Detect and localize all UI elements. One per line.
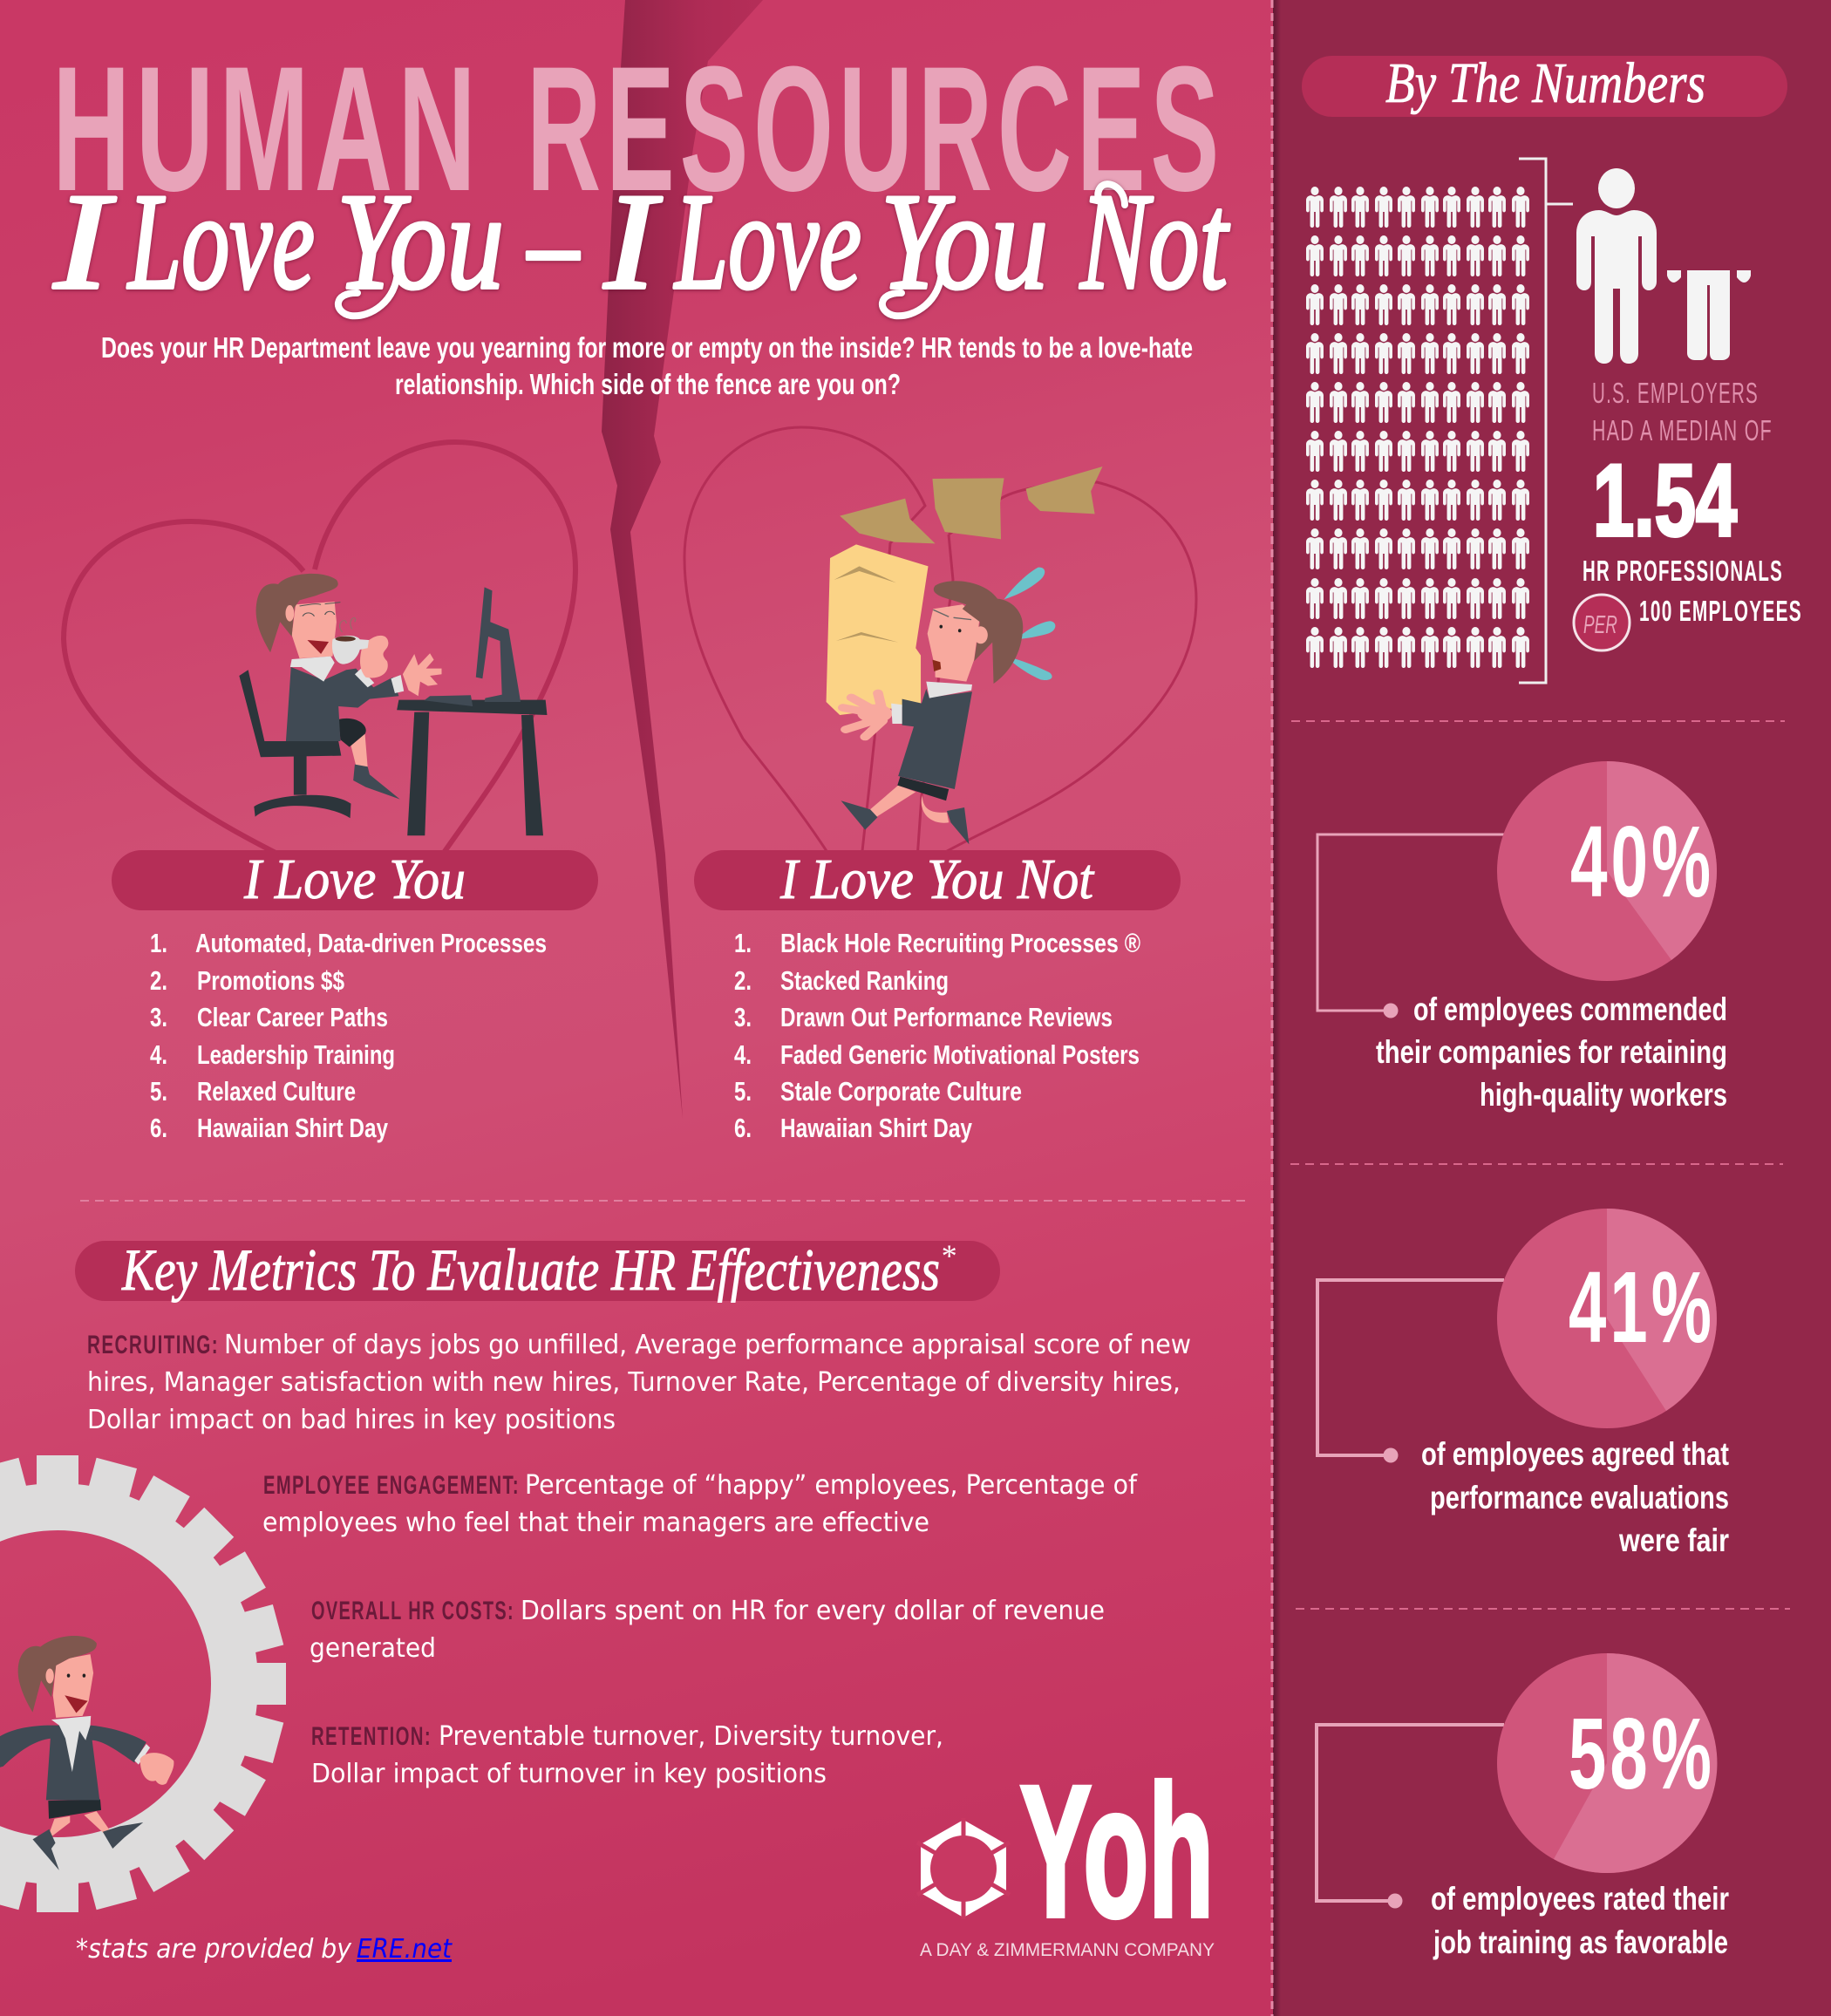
stat block: 40%: high-quality workers <box>1480 1077 1727 1113</box>
pill: I Love You: I Love You <box>243 848 466 911</box>
illustration: woman with coffee at desk <box>239 574 547 835</box>
text: recruiting <box>87 1330 1191 1435</box>
stat block: 41% <box>1317 1209 1729 1558</box>
chair <box>239 670 351 818</box>
coffee hand <box>360 636 388 678</box>
list: I Love You: Automated, Data-driven Processes <box>195 928 547 958</box>
list: I Love You Not: Drawn Out Performance Reviews <box>780 1002 1113 1032</box>
list: I Love You Not: 5. <box>734 1076 752 1107</box>
list: I Love You Not: Hawaiian Shirt Day <box>780 1113 973 1143</box>
stat: 1.54 HR professionals <box>1574 377 1802 650</box>
logo: Yoh: Yoh <box>1020 1747 1214 1956</box>
connector <box>1317 1725 1504 1908</box>
flying papers <box>840 467 1103 543</box>
stat block: 41%: 41% <box>1569 1250 1715 1364</box>
list: I Love You: Leadership Training <box>197 1039 395 1070</box>
stat block: 40%: their companies for retaining <box>1376 1034 1727 1070</box>
icon: hexagon mark <box>917 1818 1010 1919</box>
list: I Love You Not: 6. <box>734 1113 752 1143</box>
text: employee engagement <box>262 1470 1138 1538</box>
figure body <box>256 574 404 800</box>
stat block: 40%: of employees commended <box>1413 991 1727 1027</box>
pie chart 40% <box>1497 761 1717 981</box>
logo: Yoh <box>917 1747 1215 1960</box>
text: overall HR costs: generated <box>310 1633 436 1664</box>
list: I Love You Not: Stacked Ranking <box>780 965 949 996</box>
pill: key metrics heading: Key Metrics To Evaluate HR Effectiveness <box>121 1236 940 1303</box>
list: I Love You: 4. <box>150 1039 167 1070</box>
text: retention: Dollar impact of turnover in key positions <box>311 1759 827 1789</box>
list: I Love You: Promotions $$ <box>197 965 344 996</box>
bracket <box>1519 159 1573 683</box>
list: I Love You Not: 2. <box>734 965 752 996</box>
illustration: woman walking in gear <box>0 1636 174 1870</box>
script swashes <box>338 184 1125 316</box>
list: I Love You: Relaxed Culture <box>197 1076 356 1107</box>
footnote: ERE.net <box>357 1934 453 1965</box>
list: I Love You: Clear Career Paths <box>197 1002 388 1032</box>
subtitle: I <box>53 166 116 318</box>
list: I Love You Not: Black Hole Recruiting Processes ® <box>780 928 1140 958</box>
text: overall HR costs: Dollars spent on HR for every dollar of revenue <box>521 1596 1105 1626</box>
text: recruiting: hires, Manager satisfaction with new hires, Turnover Rate, Percentage of diversity hires, <box>87 1367 1181 1398</box>
pill: I Love You <box>112 848 598 911</box>
title <box>52 30 1224 228</box>
figure body <box>841 581 1023 844</box>
panel edge shadow <box>1273 0 1281 2016</box>
subtitle: I <box>603 166 662 318</box>
monitor and keyboard <box>424 587 521 706</box>
title: HUMAN <box>52 30 481 228</box>
icon: whole person <box>1576 168 1657 364</box>
stat block: 40% <box>1317 761 1727 1113</box>
list: I Love You: 2. <box>150 965 167 996</box>
logo: Yoh: A DAY & ZIMMERMANN COMPANY <box>920 1940 1215 1960</box>
pictogram: 100 employees grid <box>1306 187 1529 668</box>
sweat drops <box>1004 568 1055 680</box>
stat block: 41%: of employees agreed that <box>1421 1436 1729 1472</box>
stat: 1.54 HR professionals: PER <box>1583 611 1617 639</box>
text: recruiting: Number of days jobs go unfilled, Average performance appraisal score of new <box>224 1330 1191 1360</box>
stat block: 58%: job training as favorable <box>1433 1924 1728 1960</box>
heart outline: love <box>64 442 575 859</box>
list: I Love You Not: Stale Corporate Culture <box>780 1076 1022 1107</box>
subtitle <box>53 166 1230 318</box>
intro text: relationship. Which side of the fence are you on? <box>395 368 901 400</box>
stat block: 58%: 58% <box>1569 1697 1715 1810</box>
connector <box>1317 1280 1504 1463</box>
stat block: 40%: 40% <box>1570 805 1714 918</box>
list: I Love You: 3. <box>150 1002 167 1032</box>
pie chart 41% <box>1497 1209 1717 1428</box>
text: retention: Preventable turnover, Diversity turnover, <box>439 1721 943 1752</box>
text: employee engagement: EMPLOYEE ENGAGEMENT: <box>263 1471 520 1500</box>
subtitle: You <box>881 166 1048 318</box>
stat: 1.54 HR professionals: 1.54 <box>1593 443 1737 557</box>
subtitle: – <box>527 166 580 318</box>
list: I Love You: Hawaiian Shirt Day <box>197 1113 389 1143</box>
stat block: 58% <box>1317 1653 1729 1960</box>
stat block: 58%: of employees rated their <box>1431 1881 1729 1917</box>
title: RESOURCES <box>527 30 1224 228</box>
typing hand <box>403 653 441 696</box>
list: I Love You Not: 1. <box>734 928 752 958</box>
text: employee engagement: Percentage of “happy” employees, Percentage of <box>525 1470 1138 1501</box>
text: retention: RETENTION: <box>311 1722 432 1751</box>
stat block: 41%: performance evaluations <box>1430 1480 1729 1515</box>
desk <box>397 700 547 835</box>
pie chart 58% <box>1497 1653 1717 1873</box>
list: I Love You: 5. <box>150 1076 167 1107</box>
subtitle: You <box>337 166 504 318</box>
stat block: 41%: were fair <box>1618 1522 1729 1558</box>
pill: key metrics heading: * <box>940 1238 956 1273</box>
illustration: overwhelmed woman with papers <box>827 467 1103 844</box>
panel: left background <box>0 0 1273 2016</box>
footnote: *stats are provided by <box>76 1934 352 1965</box>
intro text: Does your HR Department leave you yearning for more or empty on the inside? HR tends to be a love-hate <box>101 331 1193 364</box>
text: recruiting: Dollar impact on bad hires in key positions <box>87 1405 616 1435</box>
text: employee engagement: employees who feel that their managers are effective <box>262 1508 929 1538</box>
subtitle: Not <box>1079 166 1230 318</box>
text: overall HR costs: OVERALL HR COSTS: <box>311 1597 514 1625</box>
heart outline: love not <box>684 427 1196 859</box>
intro text <box>101 331 1193 400</box>
coffee cup <box>332 617 369 664</box>
text: retention <box>311 1721 943 1789</box>
icon: partial person <box>1667 270 1751 360</box>
subtitle: Love <box>127 166 315 318</box>
hand and cuff <box>843 693 902 737</box>
list: I Love You Not: 3. <box>734 1002 752 1032</box>
paper stack <box>827 544 929 715</box>
list: I Love You <box>150 928 547 1143</box>
connector <box>1317 834 1504 1018</box>
pill: I Love You Not: I Love You Not <box>779 848 1095 911</box>
text: overall HR costs <box>310 1596 1105 1664</box>
panel: right background <box>1273 0 1831 2016</box>
list: I Love You: 6. <box>150 1113 167 1143</box>
list: I Love You Not: 4. <box>734 1039 752 1070</box>
subtitle: Love <box>674 166 861 318</box>
list: I Love You: 1. <box>150 928 167 958</box>
list: I Love You Not <box>734 928 1140 1143</box>
broken heart crack <box>602 0 763 1119</box>
icon: gear <box>0 1455 286 1912</box>
vertical dashed divider <box>1271 0 1273 2016</box>
text: recruiting: RECRUITING: <box>87 1331 219 1359</box>
pill: By The Numbers: By The Numbers <box>1385 51 1705 115</box>
list: I Love You Not: Faded Generic Motivational Posters <box>780 1039 1140 1070</box>
